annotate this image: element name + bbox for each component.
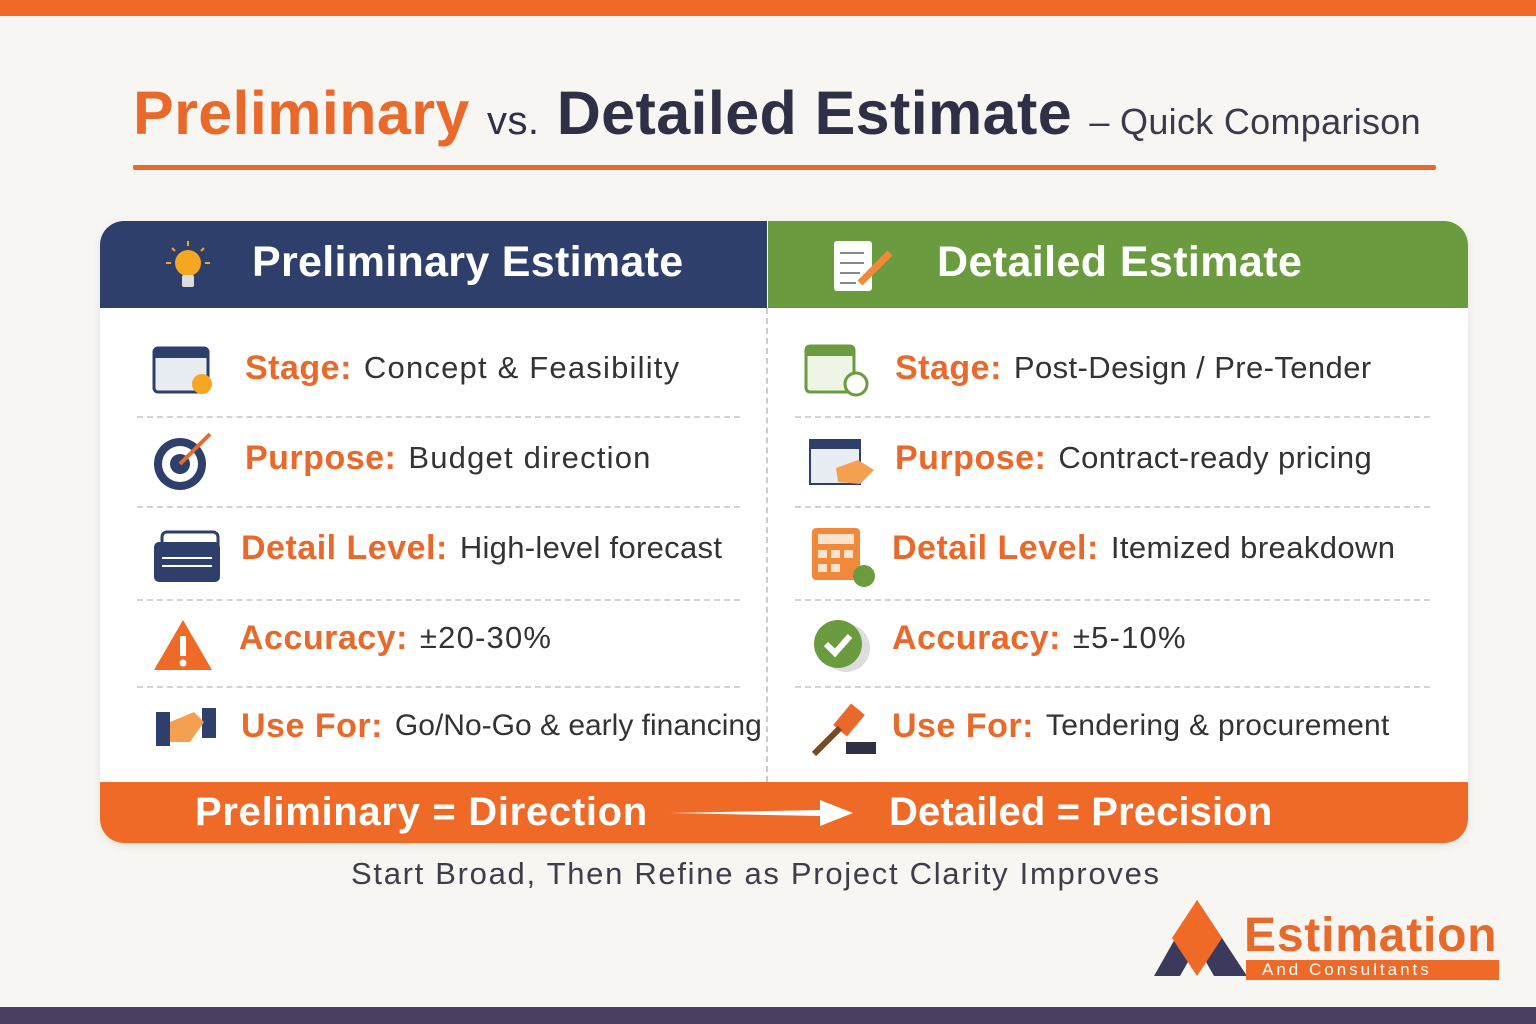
icon: warning bbox=[154, 620, 212, 670]
row: accuracy: Accuracy: bbox=[239, 618, 408, 656]
row: use for bbox=[892, 706, 1390, 744]
row: purpose: Contract-ready pricing bbox=[1058, 440, 1372, 475]
row: purpose: Budget direction bbox=[408, 440, 652, 475]
row: accuracy: ±5-10% bbox=[1073, 620, 1187, 655]
table panel bbox=[100, 221, 1468, 843]
row: detail: High-level forecast bbox=[460, 530, 722, 565]
subtitle: Start Broad, Then Refine as Project Clarity Improves bbox=[351, 856, 1161, 891]
row: purpose: Purpose: bbox=[245, 438, 396, 476]
row: stage: Stage: bbox=[895, 348, 1002, 386]
row: accuracy bbox=[239, 618, 552, 656]
header: preliminary bbox=[100, 221, 767, 308]
icon: calendar check bbox=[804, 344, 868, 396]
header: detailed: Detailed Estimate bbox=[937, 238, 1302, 286]
row: accuracy: Accuracy: bbox=[892, 618, 1061, 656]
logo: Estimation bbox=[1244, 909, 1497, 962]
icon: clipboard bbox=[834, 241, 892, 291]
top bar bbox=[0, 0, 1536, 16]
icon: lightbulb bbox=[166, 241, 210, 287]
row: accuracy: ±20-30% bbox=[420, 620, 552, 655]
logo: And Consultants bbox=[1262, 960, 1432, 979]
row: detail bbox=[241, 528, 722, 566]
icon: document handshake bbox=[809, 439, 874, 485]
header: preliminary: Preliminary Estimate bbox=[252, 238, 683, 286]
icon: gavel bbox=[812, 704, 876, 756]
icon: calendar bbox=[152, 346, 212, 394]
row: stage bbox=[895, 348, 1372, 386]
row: stage: Concept & Feasibility bbox=[364, 350, 680, 385]
row: accuracy bbox=[892, 618, 1187, 656]
title: Preliminary vs. Detailed Estimate – Quick Comparison bbox=[133, 79, 1421, 147]
row: use for: Tendering & procurement bbox=[1046, 709, 1390, 742]
row: stage bbox=[245, 348, 680, 386]
logo bbox=[1154, 900, 1499, 980]
row: use for: Use For: bbox=[241, 706, 383, 744]
row: use for: Go/No-Go & early financing bbox=[395, 709, 762, 742]
icon: handshake bbox=[156, 708, 216, 746]
icon: target bbox=[154, 432, 212, 490]
title underline bbox=[133, 165, 1436, 170]
row: use for bbox=[241, 706, 762, 744]
bottom banner bbox=[100, 782, 1468, 843]
row: stage: Post-Design / Pre-Tender bbox=[1014, 350, 1372, 385]
bottom banner: Detailed = Precision bbox=[889, 790, 1272, 834]
row: stage: Stage: bbox=[245, 348, 352, 386]
bottom bar bbox=[0, 1007, 1536, 1024]
arrow bbox=[671, 800, 853, 826]
row: detail: Detail Level: bbox=[241, 528, 448, 566]
row: purpose bbox=[245, 438, 652, 476]
row: detail bbox=[892, 528, 1395, 566]
bottom banner: Preliminary = Direction bbox=[195, 790, 648, 834]
row: detail: Itemized breakdown bbox=[1111, 530, 1395, 565]
icon: check circle bbox=[814, 620, 870, 672]
row: purpose bbox=[895, 438, 1372, 476]
right column rows bbox=[804, 344, 1395, 756]
row: detail: Detail Level: bbox=[892, 528, 1099, 566]
vertical divider bbox=[766, 308, 768, 782]
row: purpose: Purpose: bbox=[895, 438, 1046, 476]
row: use for: Use For: bbox=[892, 706, 1034, 744]
icon: calculator bbox=[812, 528, 875, 587]
icon: folders bbox=[154, 530, 220, 582]
header: detailed bbox=[768, 221, 1468, 308]
left column rows bbox=[152, 346, 762, 746]
